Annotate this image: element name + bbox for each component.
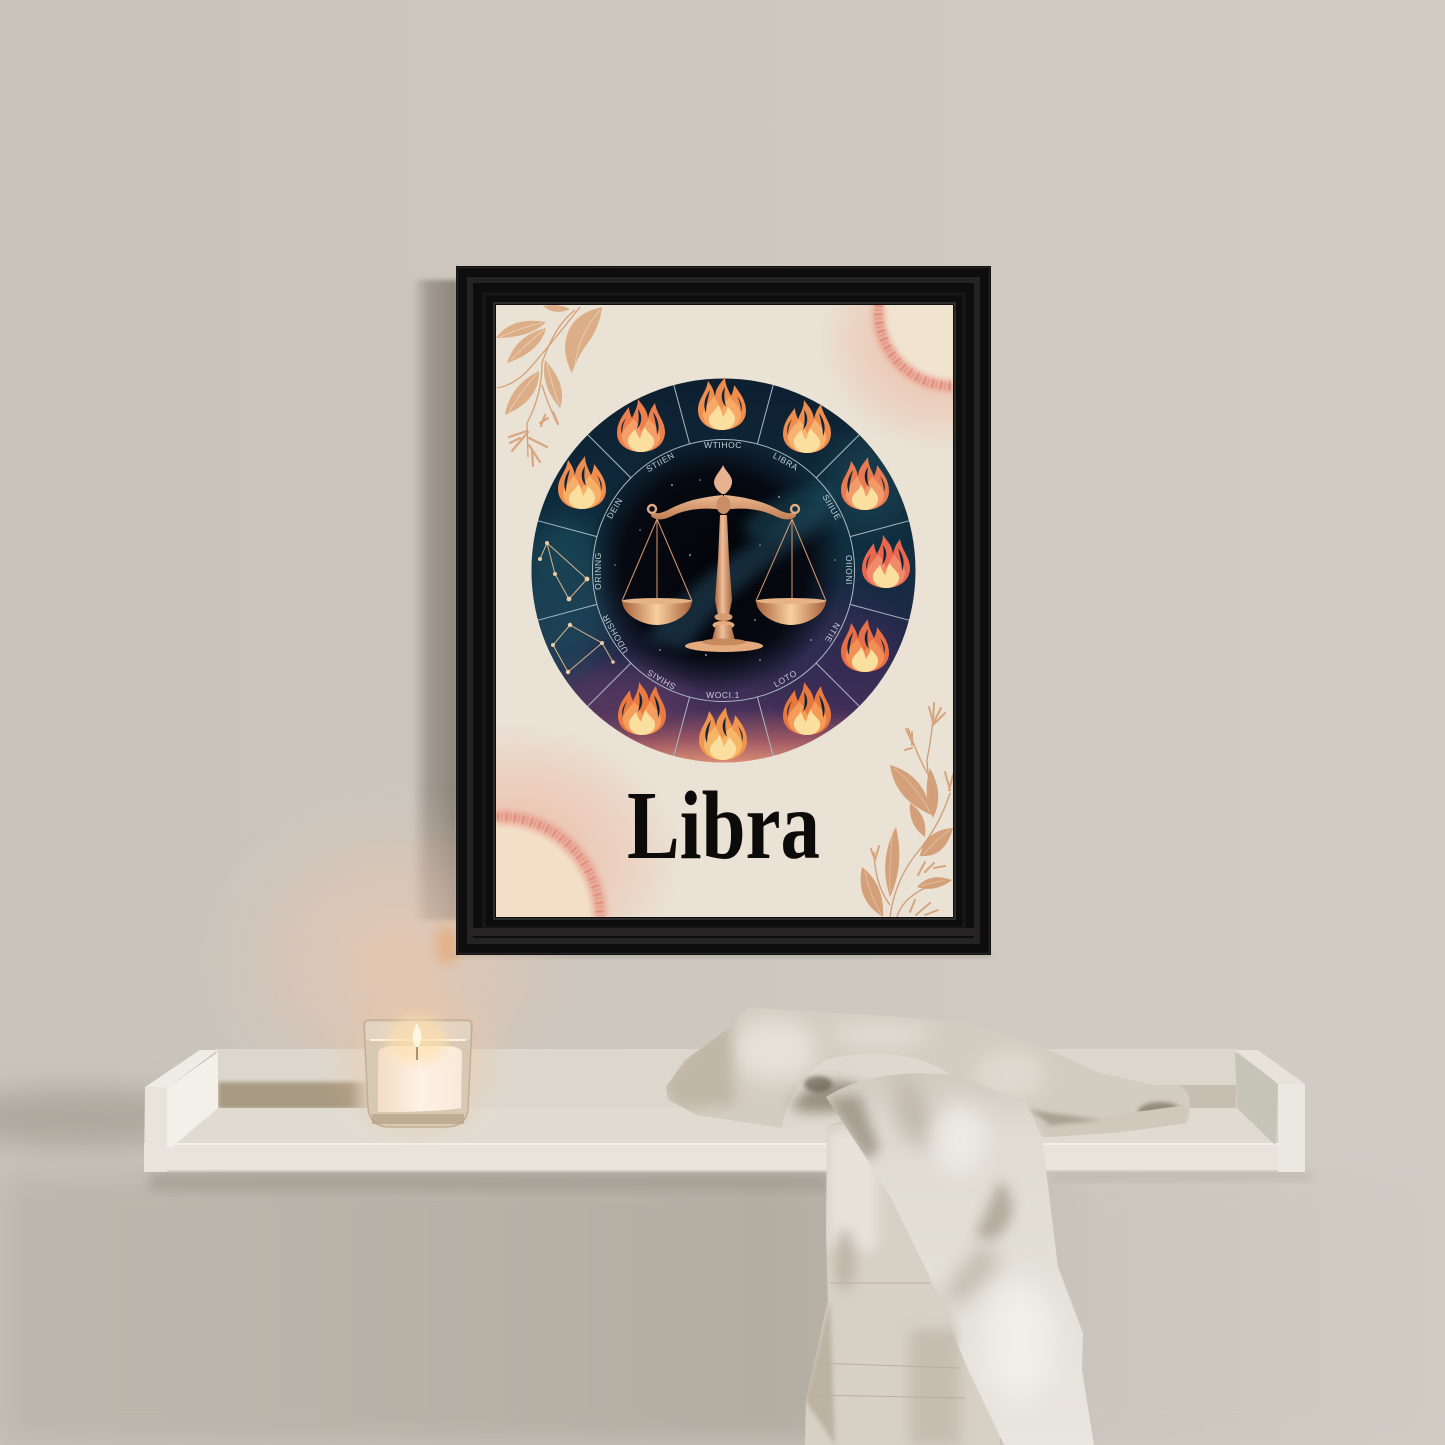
ring labels: NTIE [823,621,842,645]
candle glow on wall [205,795,585,1125]
botanical top left [496,305,602,466]
ring labels: DEIN [605,496,625,521]
sector dividers [538,385,909,756]
ring labels: UDOHSIR [600,612,630,655]
ring labels: LOTO [772,668,799,689]
title: Libra [627,772,820,880]
cloth rear hanging panel [800,1120,1010,1445]
flames [558,377,910,760]
wax [378,1046,462,1112]
flame [387,1016,447,1064]
right pan [756,601,826,625]
pink wash lower left [496,743,658,917]
shelf back panel [216,1049,1238,1109]
scale column [715,515,732,615]
candle [343,990,493,1130]
shelf left rail [144,1087,167,1172]
constellation upper left [538,541,589,601]
ring labels: WOCI.1 [706,690,740,700]
ring labels: SIIIUE [821,493,843,522]
scene: framed Libra poster above shelf [0,266,1305,1445]
scale finial [714,465,732,494]
icon: bronze balance scale [622,465,826,652]
ring labels: LIBRA [771,450,800,473]
frame drop shadow on wall [412,280,990,958]
shelf right rail [1235,1052,1278,1145]
ring labels: WTIHOC [704,440,742,450]
botanical bottom right [861,703,953,917]
scale chains [622,519,826,601]
shelf [144,1049,1305,1172]
sun corner top right [870,305,953,394]
ring labels: STIIEN [644,450,676,474]
left pan [622,601,692,625]
warm candle light on frame corner [435,925,459,965]
shelf front face [144,1144,1305,1172]
linen cloth [660,1000,1200,1445]
shelf top surface [168,1108,1278,1145]
zodiac wheel [520,377,916,762]
cloth back fold on shelf [666,1008,1190,1137]
cloth front hanging fold [820,1070,1100,1445]
nebula clouds [520,430,915,730]
glass jar [364,1020,472,1127]
pink wash top right [835,305,953,436]
constellation lower left [551,623,615,674]
inner ring [592,440,854,702]
picture frame [456,266,991,955]
sun corner bottom left [496,808,609,917]
poster [496,305,953,917]
ring labels [593,440,854,700]
stars [614,479,836,661]
ring labels: SHIAIS [645,667,677,692]
ring labels: OIIONI [844,555,854,585]
ring labels: ORINNG [593,552,603,590]
scale beam [651,495,796,519]
